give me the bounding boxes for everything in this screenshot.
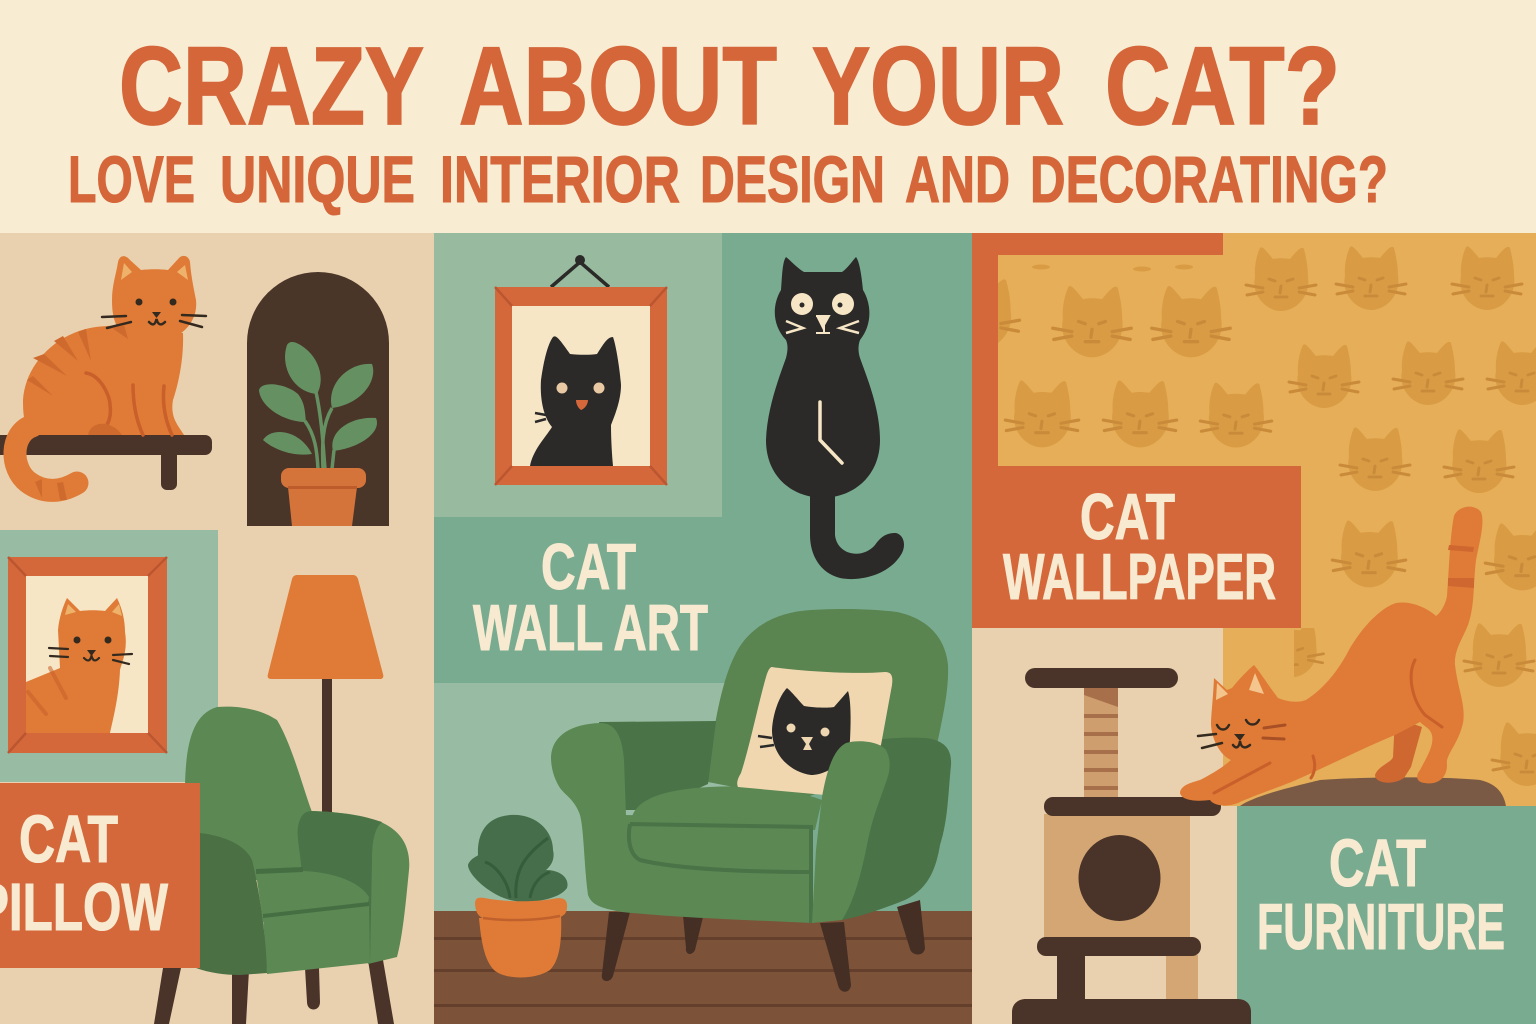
icon: framed black cat — [495, 255, 667, 485]
wallpaper cat pattern — [942, 246, 1536, 786]
icon: cat tree — [1012, 668, 1251, 1024]
title: ABOUT — [459, 25, 777, 148]
teal wall block — [0, 530, 218, 782]
icon: black cat pendulum clock — [766, 257, 904, 579]
subtitle — [68, 142, 1388, 216]
label: cat furniture: CAT — [1329, 826, 1426, 901]
title: YOUR — [812, 25, 1064, 148]
title: CRAZY — [119, 25, 424, 148]
label: cat wall art: CAT — [541, 530, 636, 603]
icon: plant in arched window — [247, 272, 389, 526]
label: cat wall art: WALL ART — [473, 591, 708, 664]
label: cat furniture — [1237, 806, 1536, 1024]
panel: cat wall art (centre) — [434, 233, 972, 1024]
subtitle: AND — [905, 142, 1010, 216]
icon: floor lamp — [268, 575, 383, 812]
label: cat pillow: CAT — [19, 802, 118, 877]
light wall block lower — [434, 683, 734, 911]
header background — [0, 0, 1536, 233]
wall shelf — [0, 435, 212, 490]
icon: green armchair with cat pillow — [551, 609, 951, 992]
scratching platform — [1240, 777, 1506, 806]
panel: cat pillow (left) — [0, 233, 434, 1024]
subtitle: DESIGN — [700, 142, 885, 216]
subtitle: UNIQUE — [220, 142, 415, 216]
icon: green armchair (left) — [154, 707, 409, 1024]
label: cat wallpaper: CAT — [1080, 480, 1175, 553]
title — [119, 25, 1340, 148]
icon: potted plant — [468, 815, 568, 978]
title: CAT? — [1105, 25, 1340, 148]
panel: cat wallpaper and furniture (right) — [942, 233, 1536, 1024]
orange frame top — [972, 233, 1223, 255]
wooden floor — [434, 911, 972, 1024]
subtitle: INTERIOR — [440, 142, 680, 216]
orange frame side — [972, 233, 998, 466]
beige wall strip — [1223, 806, 1237, 1024]
icon: black cat on pillow — [772, 688, 851, 775]
label: cat wall art — [473, 530, 708, 664]
icon: stretching orange cat — [1180, 507, 1482, 806]
icon: orange cat on shelf — [0, 256, 212, 500]
label: cat pillow — [0, 783, 200, 968]
subtitle: DECORATING? — [1030, 142, 1388, 216]
subtitle: LOVE — [68, 142, 195, 216]
icon: framed orange cat — [8, 557, 167, 753]
label: cat wallpaper: WALLPAPER — [1003, 540, 1276, 613]
label: cat wallpaper — [972, 466, 1301, 628]
beige wall lower — [972, 628, 1223, 1024]
light wall block upper — [434, 233, 722, 517]
